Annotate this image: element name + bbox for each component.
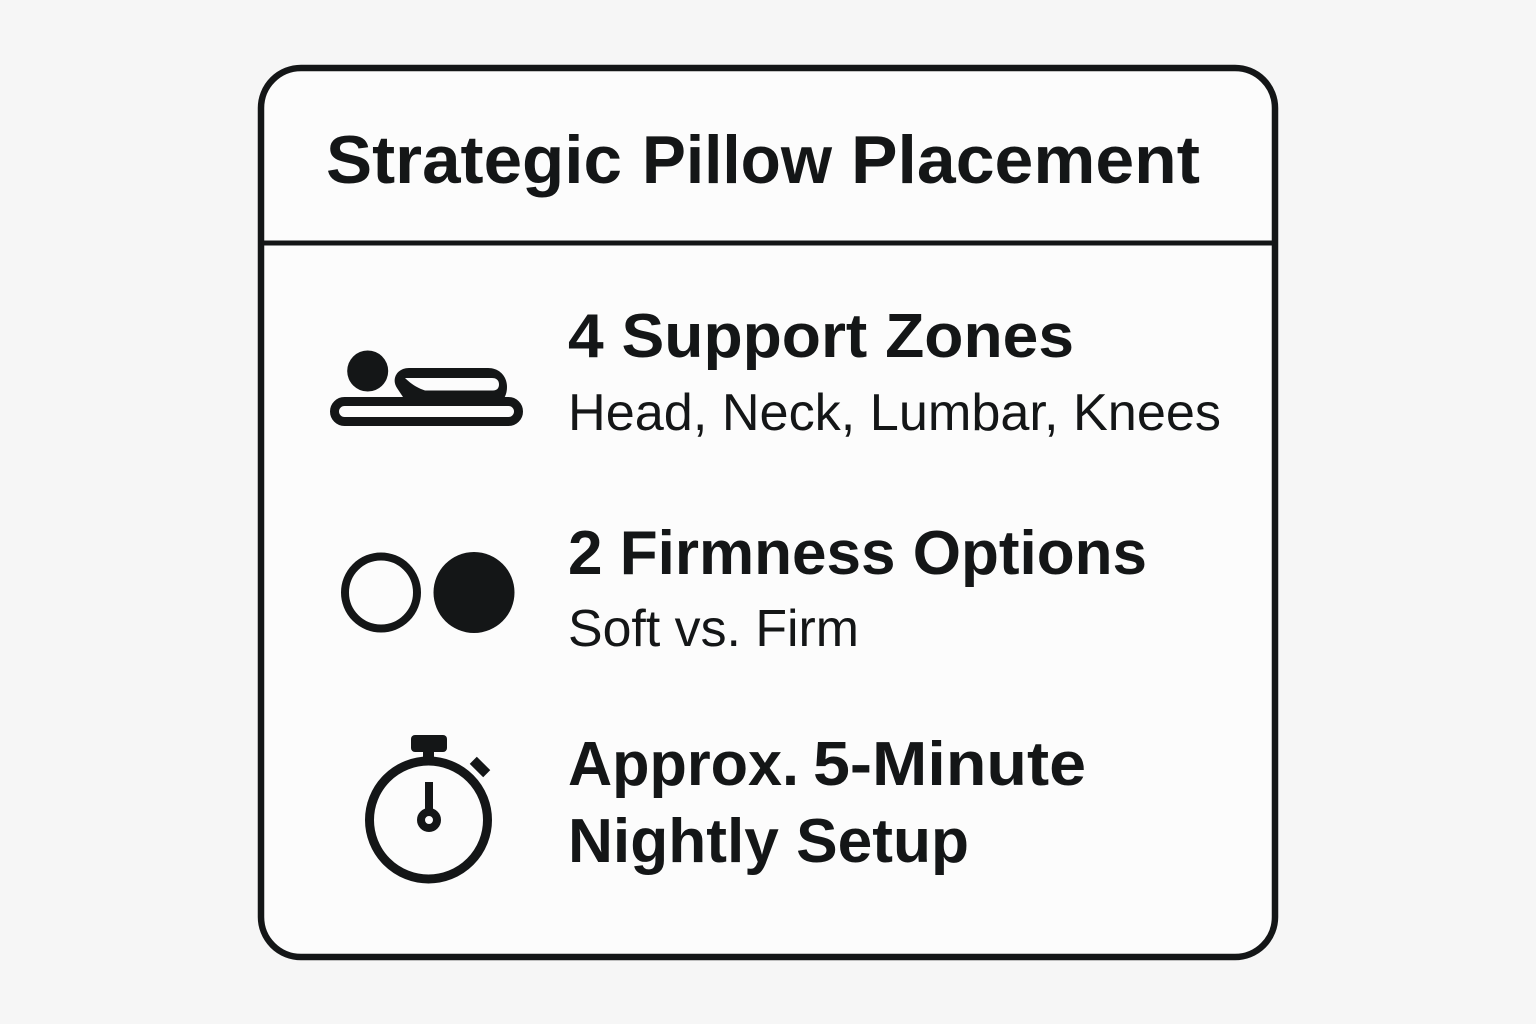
icon: person lying on pillow xyxy=(334,350,518,422)
heading: 2 firmness options: 2 Firmness Options xyxy=(568,519,1147,588)
title: Strategic xyxy=(326,122,622,198)
icon: stopwatch xyxy=(370,735,490,879)
heading: 4 support zones: 4 Support Zones xyxy=(568,302,1074,371)
row: firmness options xyxy=(345,519,1147,658)
heading: approx. 5-minute nightly setup xyxy=(568,730,1086,876)
heading: approx. 5-minute nightly setup: Approx. xyxy=(568,730,799,799)
title: Placement xyxy=(851,122,1200,198)
row: nightly setup xyxy=(370,730,1086,879)
title: Pillow xyxy=(642,122,833,198)
text: firmness detail: Soft vs. Firm xyxy=(568,600,859,658)
panel: card xyxy=(261,68,1275,957)
heading: approx. 5-minute nightly setup: Nightly Setup xyxy=(568,807,969,876)
text: support zones detail: Head, Neck, Lumbar, Knees xyxy=(568,384,1221,442)
row: support zones xyxy=(334,302,1221,442)
icon: soft and firm circles xyxy=(345,552,514,633)
heading: approx. 5-minute nightly setup: 5-Minute xyxy=(813,730,1086,799)
title xyxy=(326,122,1200,198)
